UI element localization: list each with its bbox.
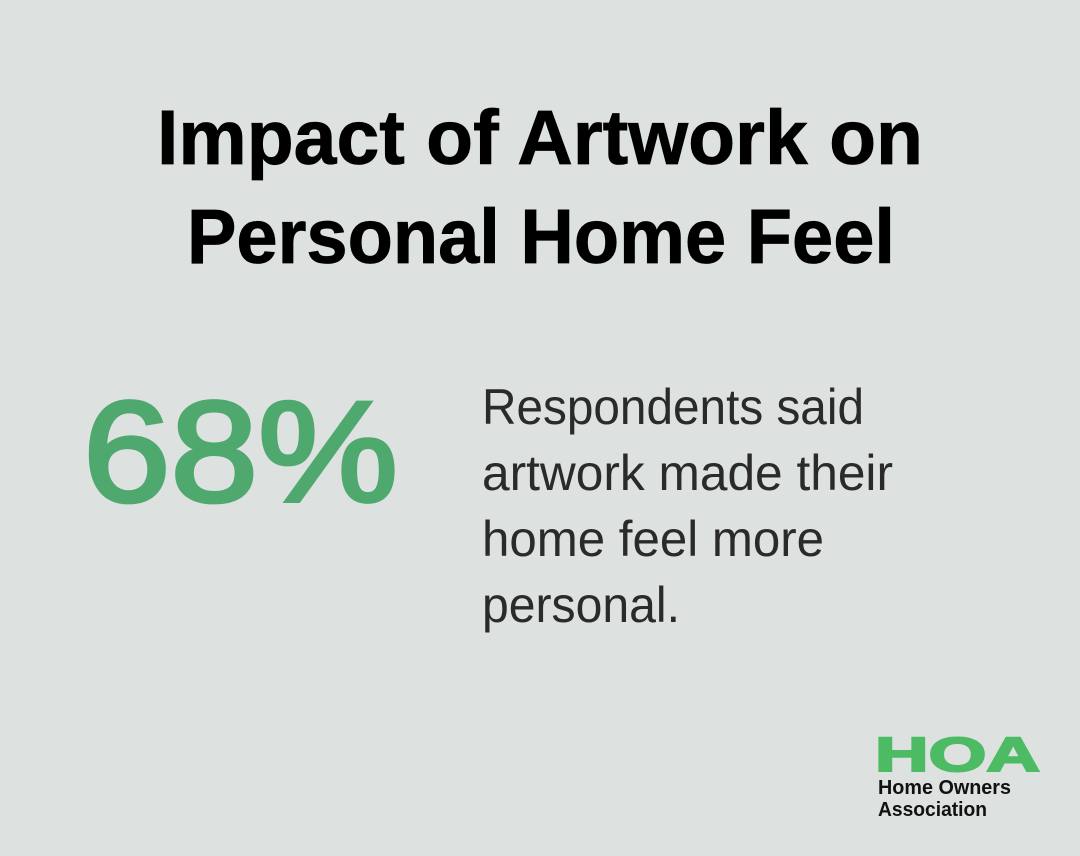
description text: personal. [482, 577, 680, 633]
description text: home feel more [482, 511, 824, 567]
logo: Home Owners Association: Association [878, 799, 987, 821]
title: Impact of Artwork on [157, 95, 923, 181]
description text: artwork made their [482, 445, 893, 501]
logo: Home Owners Association [875, 729, 1040, 821]
description text: Respondents said [482, 379, 864, 435]
title: Personal Home Feel [187, 194, 895, 280]
title [157, 95, 923, 280]
big statistic: 68%: 68% [83, 373, 398, 532]
description text [482, 379, 893, 633]
logo: Home Owners Association: HOA [875, 729, 1040, 782]
logo: Home Owners Association: Home Owners [878, 777, 1011, 799]
